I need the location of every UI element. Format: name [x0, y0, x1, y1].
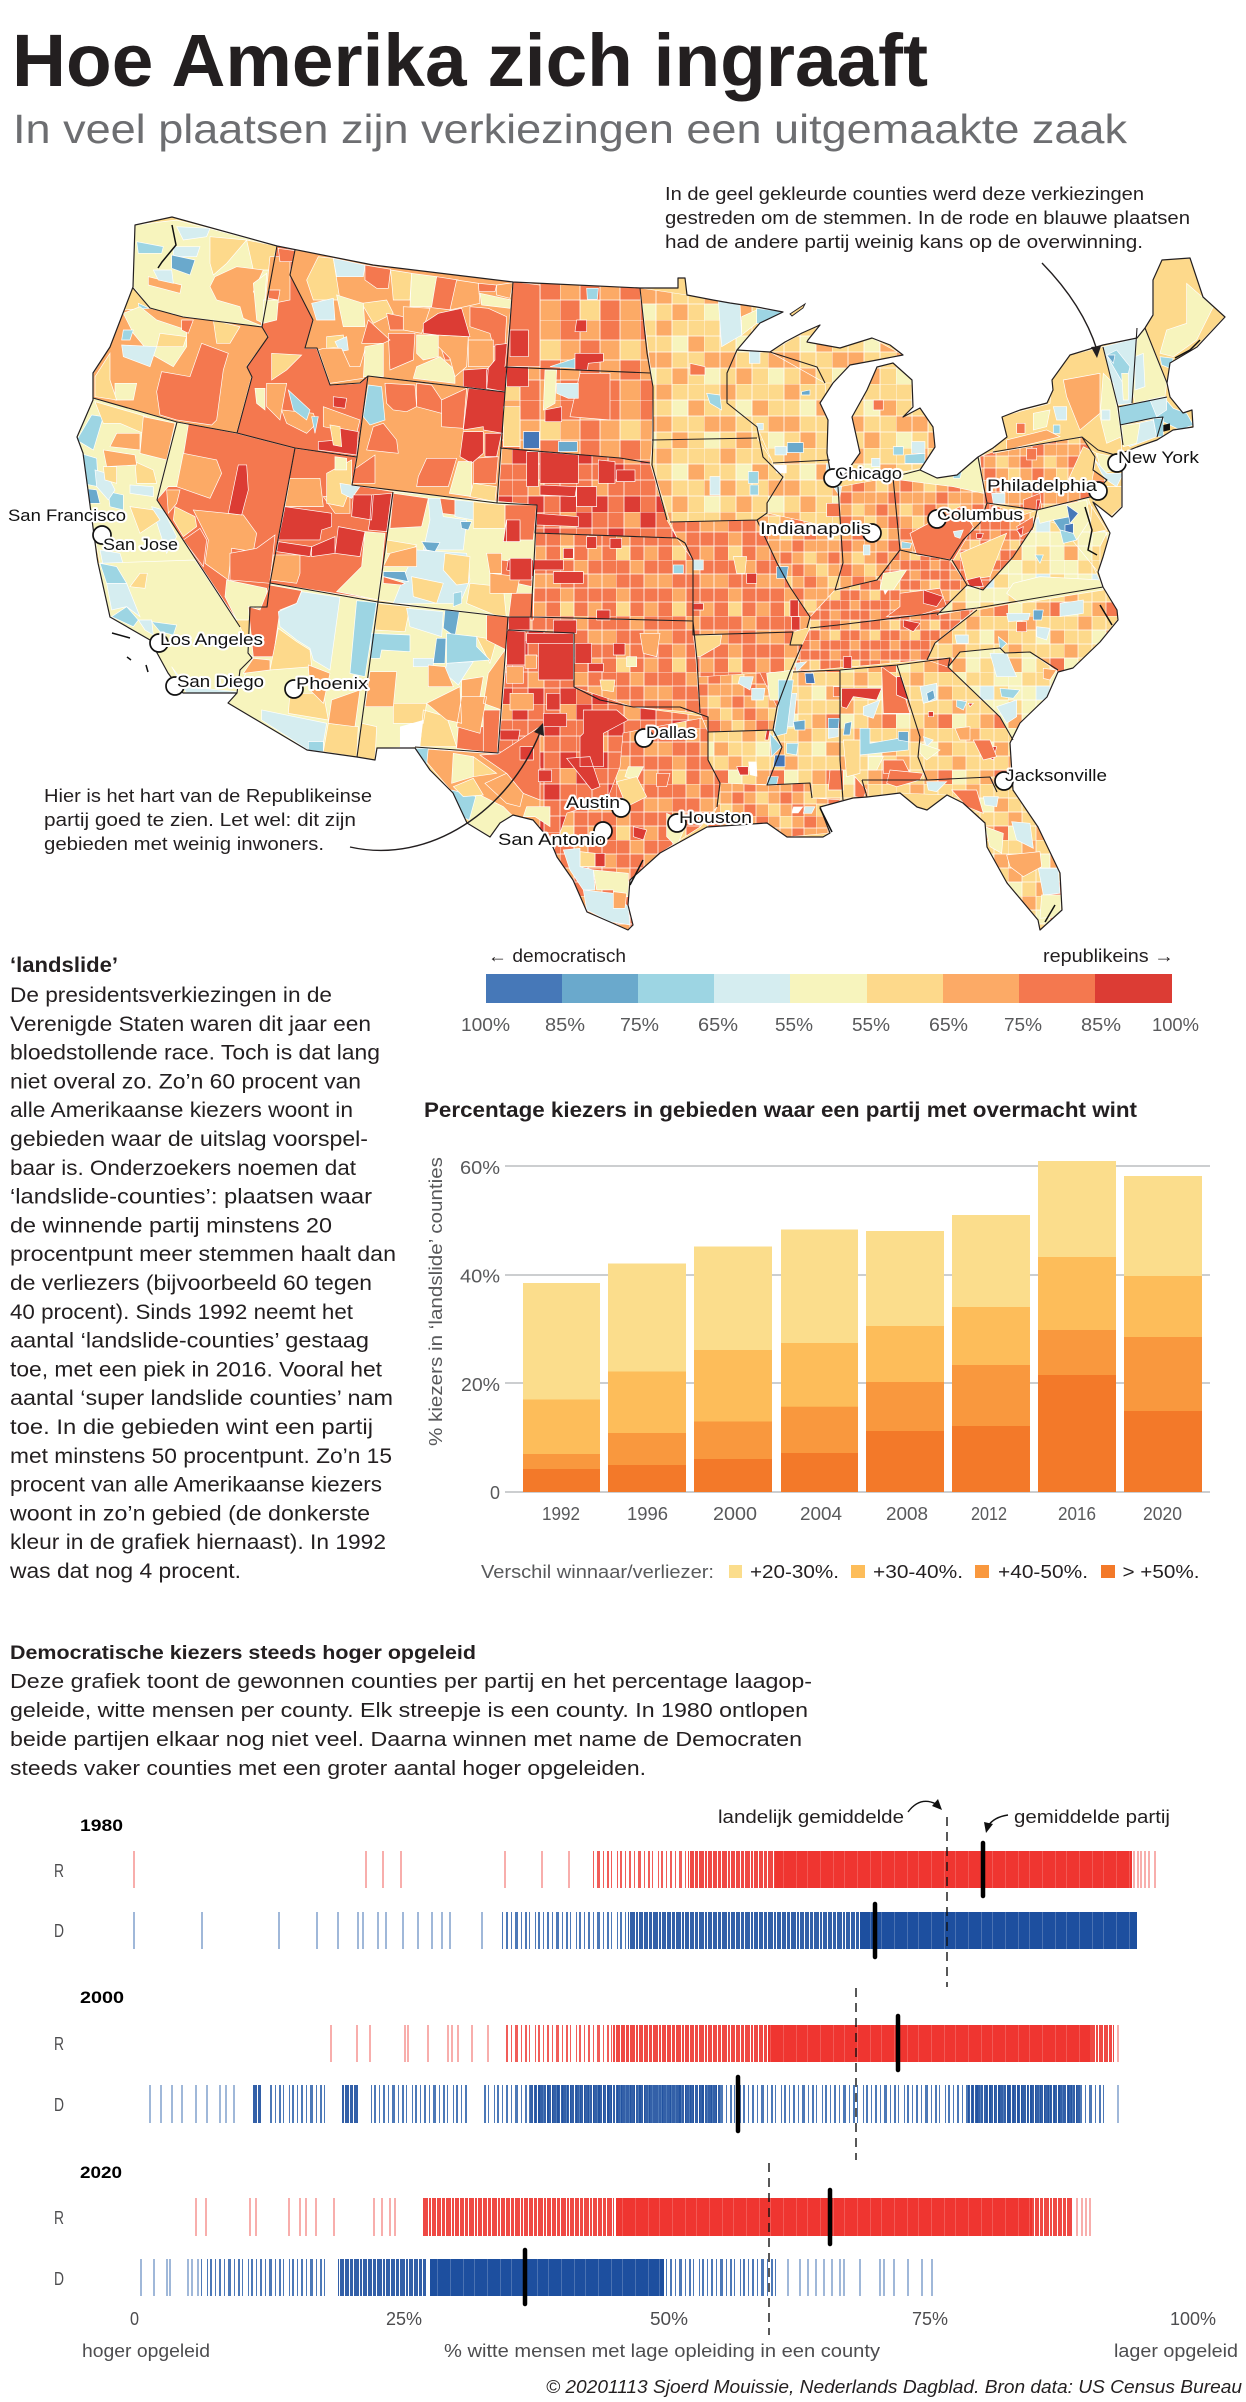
strip chart 1980: [54, 1816, 1155, 1987]
bar 2004: [781, 1230, 858, 1492]
map colour legend: 65%: [929, 1015, 968, 1035]
text block: landslide: toe. In die gebieden wint een partij: [10, 1415, 373, 1439]
map colour legend: 100%: [461, 1015, 510, 1035]
stacked bar chart: 20%: [461, 1375, 500, 1395]
text block: landslide: kleur in de grafiek hiernaast). In 1992: [10, 1530, 386, 1554]
bar 1996: [608, 1264, 686, 1492]
annotation: republican heartland: gebieden met weinig inwoners.: [44, 834, 324, 854]
map colour legend: 100%: [1152, 1015, 1199, 1035]
text block: landslide: toe, met een piek in 2016. Vooral het: [10, 1357, 382, 1381]
text block: landslide: ‘landslide’: [10, 953, 118, 977]
text block: landslide: [9, 953, 396, 1583]
republican counties 1980: [134, 1851, 1155, 1888]
stacked bar chart: 2004: [800, 1504, 842, 1524]
text block: landslide: woont in zo’n gebied (de donkerste: [9, 1501, 370, 1525]
text block: landslide: aantal ‘super landslide counties’ nam: [10, 1386, 393, 1410]
strip chart x axis: 50%: [650, 2309, 688, 2329]
strip chart 2000: R: [54, 2034, 64, 2054]
annotation: yellow counties: In de geel gekleurde counties werd deze verkiezingen: [665, 184, 1144, 204]
stacked bar chart: [426, 1157, 1210, 1524]
education section text: steeds vaker counties met een groter aantal hoger opgeleiden.: [10, 1758, 646, 1780]
party mean markers 2000: [738, 2016, 898, 2131]
southeast counties: [887, 610, 1062, 918]
map colour legend: 85%: [545, 1015, 585, 1035]
strip chart 2020: D: [54, 2269, 64, 2289]
stacked bar chart: % kiezers in ‘landslide’ counties: [426, 1157, 446, 1446]
stacked bar chart: 2012: [971, 1504, 1007, 1524]
republican counties 2000: [331, 2025, 1118, 2062]
annotation line 2: gestreden om de stemmen. In de rode en blauwe plaatsen: [665, 208, 1190, 228]
strip chart 1980: 1980: [80, 1816, 123, 1835]
coastal details: [112, 225, 1200, 922]
bar chart legend: +30-40%.: [873, 1562, 963, 1582]
bar chart legend: +20-30%.: [750, 1562, 839, 1582]
text block: landslide: alle Amerikaanse kiezers woont in: [10, 1098, 353, 1122]
democratic counties 2000: [150, 2085, 1118, 2123]
republican counties 2020: [196, 2198, 1090, 2236]
city markers and labels: Jacksonville: [1005, 766, 1107, 785]
city markers and labels: San Jose: [103, 535, 178, 554]
islands: [790, 304, 805, 316]
strip chart 2020: [54, 2163, 1090, 2335]
party mean markers 2020: [525, 2190, 830, 2304]
stacked bar chart: 2008: [886, 1504, 928, 1524]
city markers and labels: [8, 448, 1200, 849]
subtitle: In veel plaatsen zijn verkiezingen een uitgemaakte zaak: [13, 106, 1128, 152]
strip chart 2000: D: [54, 2095, 64, 2115]
bar chart legend: Verschil winnaar/verliezer:: [481, 1562, 714, 1582]
map colour legend: 55%: [775, 1015, 813, 1035]
annotation: republican heartland: Hier is het hart van de Republikeinse: [44, 786, 372, 806]
southern counties: [500, 603, 910, 925]
bar chart legend: +40-50%.: [998, 1562, 1088, 1582]
northeast counties: [863, 258, 1225, 632]
strip chart x axis: 100%: [1170, 2309, 1216, 2329]
city markers and labels: Indianapolis: [760, 519, 871, 538]
text block: landslide: de verliezers (bijvoorbeeld 60 tegen: [10, 1271, 372, 1295]
city markers and labels: New York: [1118, 448, 1200, 467]
stacked bar chart: 2016: [1058, 1504, 1096, 1524]
stacked bar chart: 40%: [460, 1266, 500, 1286]
annotation line 3: had de andere partij weinig kans op de overwinning.: [665, 232, 1143, 252]
annotation: national average: [718, 1799, 942, 1827]
strip chart 2000: [54, 1988, 1118, 2160]
text block: landslide: bloedstollende race. Toch is dat lang: [10, 1041, 380, 1065]
strip chart x axis: lager opgeleid: [1114, 2341, 1238, 2361]
strip chart x axis: 0: [130, 2309, 139, 2329]
text block: landslide: met minstens 50 procentpunt. Zo’n 15: [10, 1444, 392, 1468]
map colour legend: 75%: [620, 1015, 659, 1035]
county colour fills: [60, 200, 1240, 940]
city markers and labels: Columbus: [937, 505, 1023, 524]
education section text: Deze grafiek toont de gewonnen counties per partij en het percentage laagop-: [10, 1671, 812, 1693]
party mean markers 1980: [875, 1843, 983, 1957]
western counties: [77, 220, 540, 620]
annotation: party average: [984, 1807, 1170, 1833]
credit line: © 20201113 Sjoerd Mouissie, Nederlands Dagblad. Bron data: US Census Bureau: [546, 2377, 1242, 2397]
stacked bar chart: 2000: [713, 1504, 757, 1524]
national average dashed line 2000: [855, 1988, 857, 2160]
bar chart legend: [481, 1562, 1200, 1582]
annotation: national average: landelijk gemiddelde: [718, 1807, 904, 1827]
democratic counties 2020: [141, 2259, 932, 2296]
strip chart 2000: 2000: [80, 1988, 124, 2007]
education section text: beide partijen elkaar nog niet veel. Daarna winnen met name de Democraten: [10, 1729, 802, 1751]
education section text: [10, 1671, 812, 1780]
stacked bar chart: 2020: [1143, 1504, 1182, 1524]
map colour legend: 75%: [1004, 1015, 1042, 1035]
bar 2020: [1124, 1176, 1202, 1492]
bar chart legend: > +50%.: [1122, 1562, 1200, 1582]
state borders: [93, 246, 1167, 807]
city markers and labels: Chicago: [835, 464, 902, 483]
national average dashed line 2020: [768, 2163, 770, 2335]
strip chart 2020: 2020: [80, 2163, 122, 2182]
stacked bar chart: 0: [490, 1483, 500, 1503]
strip chart 2020: R: [54, 2208, 64, 2228]
strip chart x axis: 25%: [386, 2309, 422, 2329]
city markers and labels: San Francisco: [8, 506, 126, 525]
bar 2008: [866, 1231, 944, 1492]
text block: landslide: was dat nog 4 procent.: [9, 1559, 241, 1583]
strip chart x axis: [82, 2309, 1238, 2361]
text block: landslide: de winnende partij minstens 20: [10, 1213, 332, 1237]
text block: landslide: procent van alle Amerikaanse kiezers: [10, 1473, 382, 1497]
southwestern counties: [98, 560, 540, 837]
text block: landslide: De presidentsverkiezingen in de: [10, 983, 332, 1007]
city markers and labels: Houston: [679, 808, 752, 827]
bar 2012: [952, 1215, 1030, 1492]
city markers and labels: Los Angeles: [160, 630, 263, 649]
strip chart 1980: R: [54, 1861, 64, 1881]
map colour legend: 85%: [1081, 1015, 1121, 1035]
city markers and labels: Philadelphia: [987, 476, 1098, 495]
coastline outline: [77, 217, 1225, 930]
text block: landslide: procentpunt meer stemmen haalt dan: [10, 1242, 396, 1266]
city markers and labels: San Antonio: [498, 830, 606, 849]
title: Hoe Amerika zich ingraaft: [12, 19, 928, 102]
democratic counties 1980: [134, 1912, 1137, 1949]
annotation: republican heartland: [44, 786, 372, 854]
city markers and labels: Dallas: [646, 723, 696, 742]
national average dashed line 1980: [946, 1817, 948, 1987]
text block: landslide: niet overal zo. Zo’n 60 procent van: [10, 1069, 361, 1093]
map colour legend: ← democratisch: [488, 946, 626, 966]
text block: landslide: aantal ‘landslide-counties’ gestaag: [10, 1329, 369, 1353]
bar 2000: [694, 1246, 772, 1492]
strip chart x axis: 75%: [912, 2309, 948, 2329]
stacked bar chart: 60%: [460, 1158, 500, 1178]
text block: landslide: Verenigde Staten waren dit jaar een: [10, 1012, 371, 1036]
stacked bar chart: 1996: [627, 1504, 668, 1524]
map colour legend: 65%: [698, 1015, 738, 1035]
text block: landslide: baar is. Onderzoekers noemen dat: [10, 1156, 356, 1180]
map colour legend: republikeins →: [1043, 946, 1174, 966]
stacked bar chart: 1992: [542, 1504, 580, 1524]
strip chart x axis: % witte mensen met lage opleiding in een county: [444, 2341, 880, 2361]
education section heading: Democratische kiezers steeds hoger opgeleid: [10, 1643, 476, 1664]
bar chart heading: Percentage kiezers in gebieden waar een partij met overmacht wint: [424, 1099, 1137, 1122]
map colour legend: 55%: [852, 1015, 890, 1035]
city markers and labels: San Diego: [177, 672, 264, 691]
bar 2016: [1038, 1161, 1116, 1492]
arrow to northeast: [1042, 263, 1101, 358]
text block: landslide: gebieden waar de uitslag voorspel-: [10, 1127, 368, 1151]
strip chart x axis: hoger opgeleid: [82, 2341, 210, 2361]
bar 1992: [523, 1283, 600, 1492]
city markers and labels: Austin: [566, 793, 620, 812]
plains and midwest counties: [503, 288, 925, 617]
strip chart 1980: D: [54, 1921, 64, 1941]
education section text: geleide, witte mensen per county. Elk streepje is een county. In 1980 ontlopen: [10, 1700, 808, 1722]
arrow to Texas: [350, 723, 544, 850]
city markers and labels: Phoenix: [296, 674, 369, 693]
annotation: party average: gemiddelde partij: [1014, 1807, 1170, 1827]
text block: landslide: ‘landslide-counties’: plaatsen waar: [10, 1185, 372, 1209]
text block: landslide: 40 procent). Sinds 1992 neemt het: [10, 1300, 353, 1324]
map colour legend: [461, 946, 1199, 1035]
annotation: republican heartland: partij goed te zien. Let wel: dit zijn: [44, 810, 356, 830]
